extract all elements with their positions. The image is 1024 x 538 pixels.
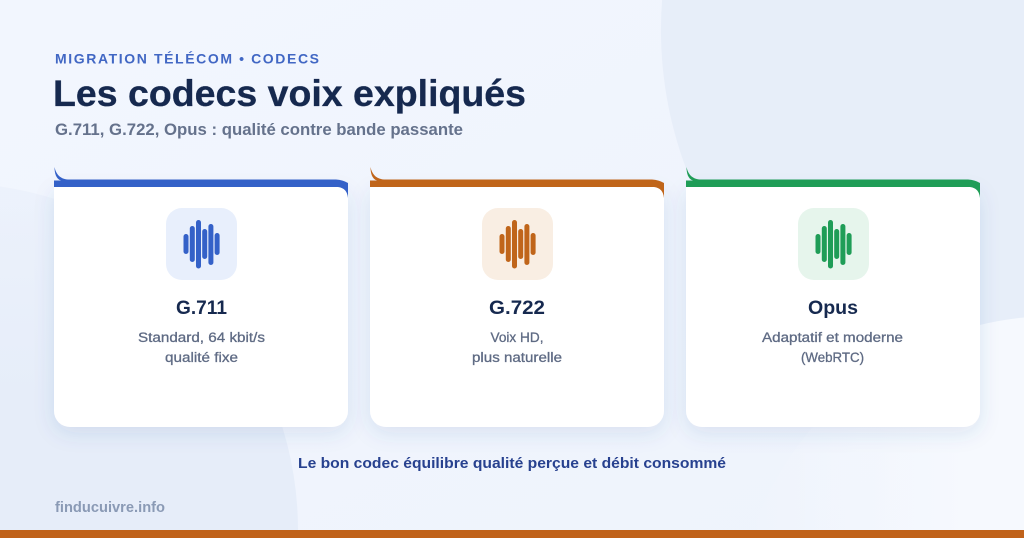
card background xyxy=(54,187,348,427)
description: plus naturelle xyxy=(472,350,562,365)
panel: G.722 xyxy=(370,167,664,427)
description: (WebRTC) xyxy=(801,350,864,365)
description: Voix HD, xyxy=(490,330,544,345)
card background xyxy=(370,187,664,427)
heading: G.722 xyxy=(489,298,545,319)
accent bar xyxy=(370,167,664,198)
title: Les codecs voix expliqués xyxy=(53,73,526,114)
takeaway: Le bon codec équilibre qualité perçue et débit consommé xyxy=(298,455,726,472)
source: finducuivre.info xyxy=(55,499,165,516)
subtitle: G.711, G.722, Opus : qualité contre bande passante xyxy=(55,121,463,139)
description: Adaptatif et moderne xyxy=(762,330,903,345)
icon: waveform xyxy=(166,208,237,280)
card background xyxy=(686,187,980,427)
description: Standard, 64 kbit/s xyxy=(138,330,265,345)
accent bar xyxy=(686,167,980,198)
icon: waveform xyxy=(482,208,553,280)
heading: G.711 xyxy=(176,298,227,319)
heading: Opus xyxy=(808,298,858,319)
description: qualité fixe xyxy=(165,350,238,365)
panel: G.711 xyxy=(54,167,348,427)
panel: Opus xyxy=(686,167,980,427)
eyebrow: MIGRATION TÉLÉCOM • CODECS xyxy=(55,50,319,66)
icon: waveform xyxy=(798,208,869,280)
bottom bar xyxy=(0,530,1024,538)
accent bar xyxy=(54,167,348,198)
